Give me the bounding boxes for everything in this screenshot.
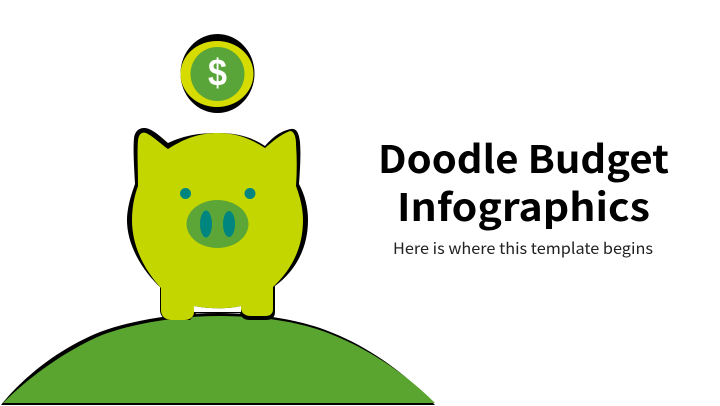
subtitle: Here is where this template begins (393, 237, 653, 259)
title: Infographics (397, 177, 650, 232)
title: Doodle Budget (378, 129, 669, 184)
right eye (244, 188, 256, 199)
icon: piggy bank (127, 128, 308, 320)
title (378, 129, 669, 232)
pig outline (127, 128, 308, 320)
dollar sign: $ (208, 52, 227, 94)
white gap between legs (194, 306, 241, 312)
left eye (180, 188, 191, 199)
pig body (132, 131, 303, 320)
right nostril (223, 211, 235, 237)
snout (186, 200, 248, 248)
hill (1, 313, 435, 405)
icon: coin (180, 34, 254, 113)
left nostril (200, 210, 212, 238)
